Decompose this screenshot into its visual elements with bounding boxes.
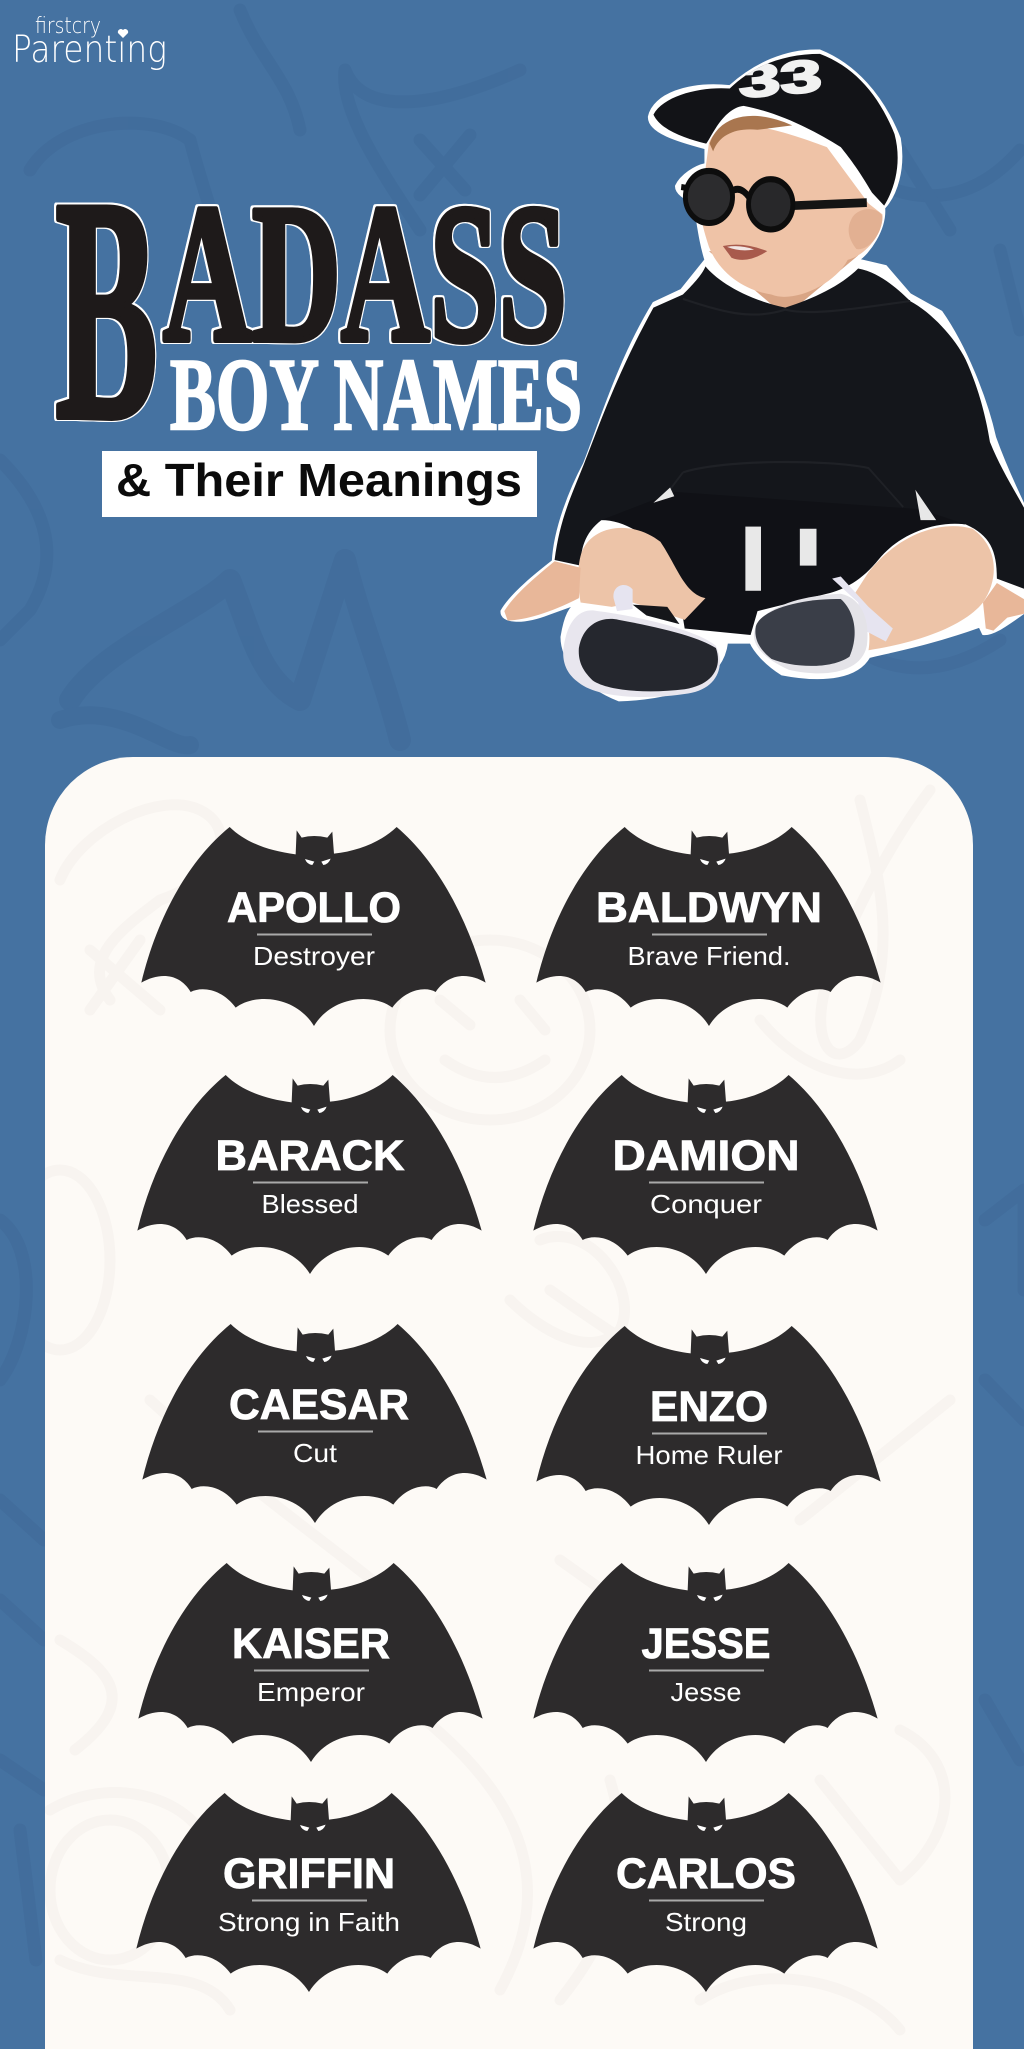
bat card: Damion (533, 1075, 878, 1274)
bat card: Jesse (533, 1563, 878, 1762)
bat card: Griffin (136, 1793, 481, 1992)
bat card: Damion: Conquer (650, 1189, 762, 1219)
bat card: Kaiser: KAISER (232, 1620, 390, 1668)
bat card: Carlos: Strong (665, 1907, 747, 1937)
title: Badass (55, 133, 567, 487)
baby shoes (563, 576, 893, 697)
logo: FirstCry Parenting: firstcry (35, 14, 101, 39)
bat card: Enzo: ENZO (650, 1383, 768, 1431)
bat card: Apollo (141, 827, 486, 1026)
bat card: Carlos (533, 1793, 878, 1992)
bat card: Barack (137, 1075, 482, 1274)
baby drawstrings (653, 488, 936, 591)
baby hoodie details (653, 299, 910, 511)
bat card: Damion: DAMION (612, 1132, 800, 1180)
bat card: Barack: Blessed (262, 1189, 358, 1219)
baby hair (710, 116, 792, 151)
subtitle: & Their Meanings: & Their Meanings (116, 454, 522, 506)
baby legs (578, 526, 994, 650)
bat card: Griffin: GRIFFIN (223, 1850, 395, 1898)
baby neck (709, 251, 858, 316)
baby shorts (601, 492, 966, 635)
bat card: Apollo: APOLLO (227, 884, 401, 932)
baby white sticker outline (501, 51, 1024, 700)
bat card: Caesar (142, 1324, 487, 1523)
bat card: Griffin: Strong in Faith (218, 1907, 400, 1937)
baby hands (504, 561, 1024, 631)
panel: names list (45, 757, 973, 2049)
subtitle: & Their Meanings (102, 451, 537, 517)
bat card: Baldwyn: Brave Friend. (627, 941, 791, 971)
bat card: Caesar: Cut (293, 1438, 338, 1468)
panel doodles (10, 790, 950, 2030)
baby face (701, 125, 883, 297)
bat card: Kaiser: Emperor (257, 1677, 365, 1707)
bat card: Jesse: Jesse (670, 1677, 742, 1707)
bat card: Jesse: JESSE (642, 1620, 770, 1668)
logo: FirstCry Parenting: Parenting (12, 28, 167, 71)
bat card: Caesar: CAESAR (229, 1381, 409, 1429)
baby sunglasses (681, 171, 867, 230)
bat card: Carlos: CARLOS (616, 1850, 796, 1898)
title: Boy Names: BOY NAMES (170, 338, 582, 452)
bat card: Barack: BARACK (216, 1132, 404, 1180)
bat card: Baldwyn: BALDWYN (596, 884, 822, 932)
bat card: Baldwyn (536, 827, 881, 1026)
title: Badass: ADASS (163, 164, 567, 383)
baby cap (653, 50, 898, 206)
bat card: Enzo (536, 1326, 881, 1525)
baby ear (849, 209, 882, 249)
bat card: Apollo: Destroyer (253, 941, 375, 971)
baby photo illustration (501, 50, 1024, 700)
logo: FirstCry Parenting (12, 14, 167, 71)
bat card: Enzo: Home Ruler (636, 1440, 783, 1470)
bat card: Kaiser (138, 1563, 483, 1762)
baby hoodie (555, 266, 1024, 589)
baby cap: 33 (737, 50, 823, 108)
title: Badass: B (55, 133, 158, 487)
baby mouth (723, 245, 767, 260)
